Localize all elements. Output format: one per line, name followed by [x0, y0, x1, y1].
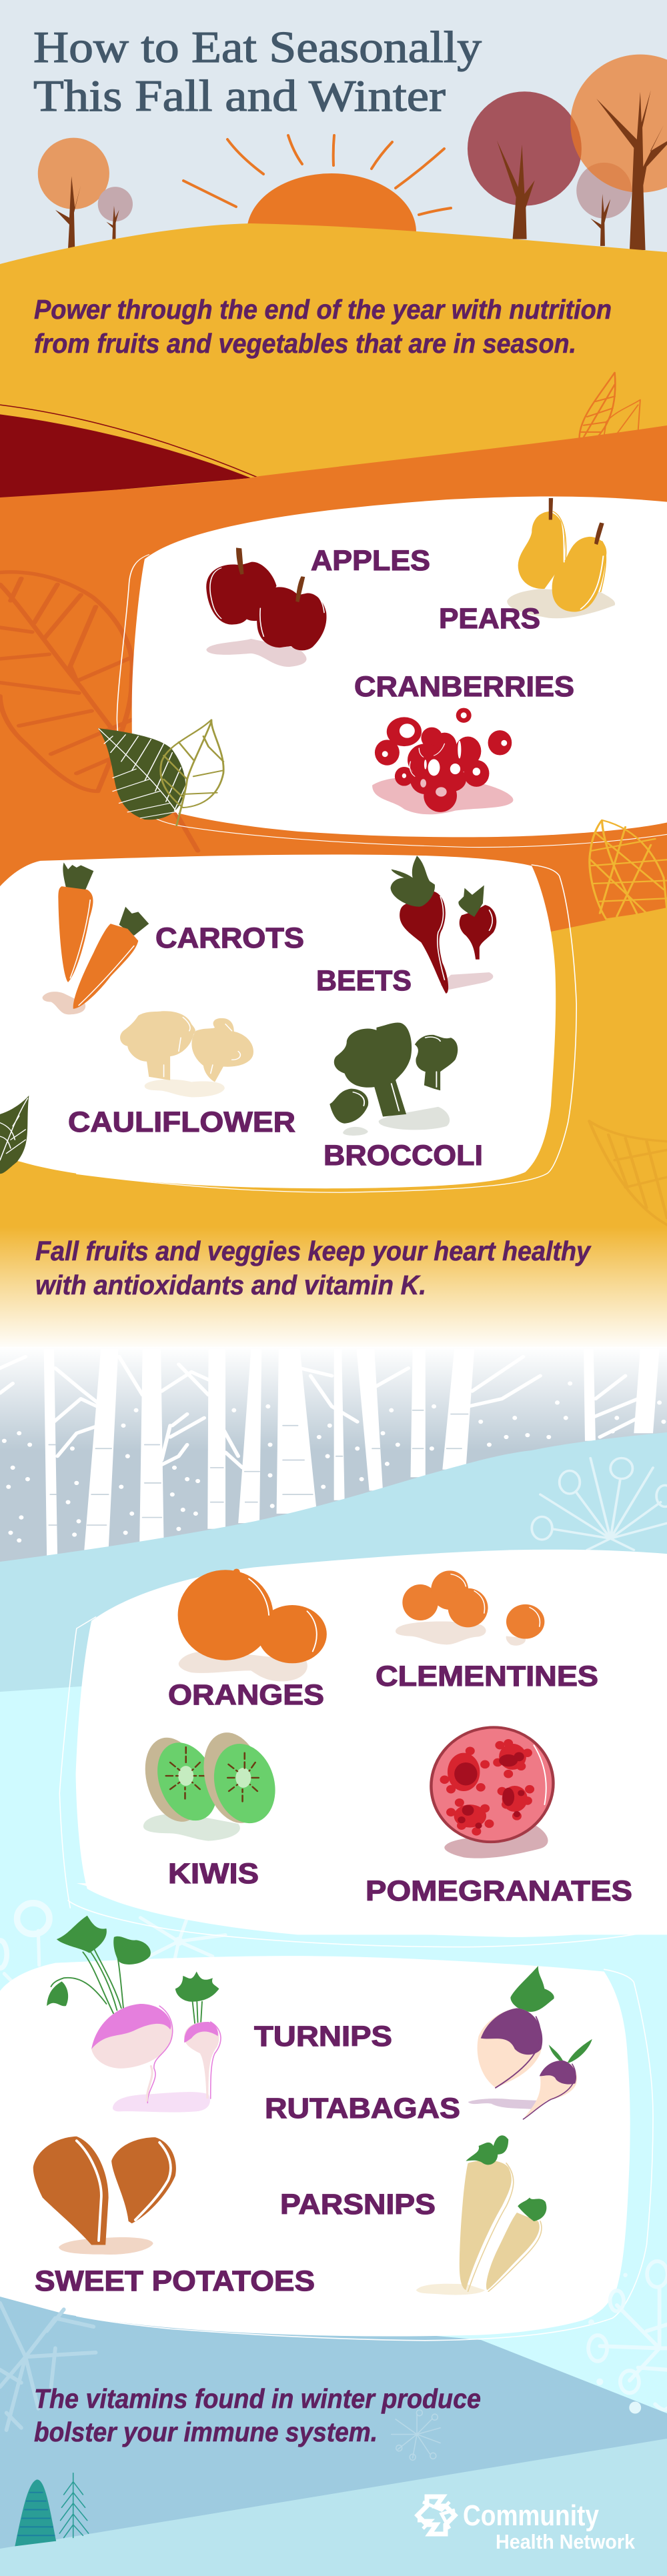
snowflake top right: [532, 1458, 667, 1550]
dark red hill: [0, 405, 257, 500]
sun: [247, 173, 416, 291]
icon: rutabagas: [468, 1966, 592, 2119]
logo: Community Health Network: Health Network: [496, 2530, 636, 2553]
icon: apples: [206, 547, 327, 667]
panel 3 labels: ORANGES: [168, 1679, 324, 1711]
fall closing text: Fall fruits and veggies keep your heart healthy: [35, 1236, 592, 1266]
panel 1 labels: APPLES: [311, 545, 430, 577]
orange hill: [0, 425, 667, 1000]
panel 4 labels: SWEET POTATOES: [35, 2265, 315, 2297]
sky background: [0, 0, 667, 333]
panel 2 white: carrots beets cauliflower broccoli: [0, 854, 576, 1192]
winter forest: [0, 1347, 667, 1574]
panel 3 bottom edge and outline: [68, 1883, 667, 1947]
panel 1 labels: [311, 545, 574, 703]
icon: pomegranate: [417, 1715, 568, 1858]
panel 2 labels: CARROTS: [155, 922, 304, 954]
winter closing text: The vitamins found in winter produce: [34, 2383, 481, 2414]
icon: logo knot: [418, 2497, 455, 2534]
tree: teal line: [59, 2473, 89, 2537]
winter hill light blue: [0, 1432, 667, 1707]
decorative leaves on hill: [580, 373, 640, 439]
title: This Fall and Winter: [33, 71, 446, 121]
fall closing text: with antioxidants and vitamin K.: [35, 1270, 426, 1300]
snowflake right on panel 4: [588, 2261, 667, 2414]
panel 3 labels: KIWIS: [168, 1858, 259, 1890]
panel 4 white: turnips rutabagas parsnips sweet potatoes: [0, 1916, 653, 2341]
panel 4 labels: RUTABAGAS: [265, 2093, 460, 2125]
panel 3 labels: POMEGRANATES: [366, 1875, 632, 1907]
panel 2 labels: [68, 922, 483, 1172]
panel 3 labels: CLEMENTINES: [376, 1660, 598, 1692]
icon: broccoli: [329, 1023, 458, 1136]
logo: Community Health Network: [418, 2497, 636, 2553]
faint leaf on yellow: [589, 1121, 667, 1225]
leaf: left green small: [0, 1096, 29, 1174]
tree: small left orange: [38, 138, 109, 248]
leaf: hatched green: [98, 728, 187, 820]
tree: large right group: [468, 55, 667, 250]
panel 3 labels: [168, 1660, 632, 1907]
title: [33, 23, 482, 121]
panel 2 labels: BROCCOLI: [323, 1140, 483, 1172]
winter closing text: bolster your immune system.: [34, 2417, 378, 2447]
sun rays: [183, 135, 451, 215]
intro text: [34, 294, 612, 359]
icon: cauliflower: [120, 1011, 253, 1097]
yellow hill background: [0, 223, 667, 1354]
winter lower pale field: [0, 1667, 667, 2427]
title: How to Eat Seasonally: [33, 23, 482, 72]
intro text: from fruits and vegetables that are in season.: [34, 328, 576, 359]
panel 1 white: apples pears cranberries: [117, 496, 667, 848]
winter closing text: [34, 2383, 481, 2447]
leaf: olive outline: [161, 720, 223, 826]
snowflake lower left: [0, 2303, 96, 2430]
tree: teal solid: [15, 2479, 56, 2546]
icon: sweet potatoes: [33, 2137, 176, 2255]
icon: cranberries: [372, 708, 513, 814]
snowflakes on pale field: [0, 1903, 225, 1983]
icon: parsnips: [416, 2135, 546, 2295]
panel 4 labels: TURNIPS: [254, 2021, 392, 2053]
small snowflake by text: [392, 2410, 440, 2460]
intro text: Power through the end of the year with nutrition: [34, 294, 612, 325]
bottom light blue band: [0, 2439, 667, 2576]
panel 2 labels: CAULIFLOWER: [68, 1106, 295, 1138]
icon: turnips: [47, 1916, 221, 2113]
leaf: yellow net: [590, 820, 667, 920]
panel 1 labels: PEARS: [439, 603, 540, 635]
logo: Community Health Network: Community: [463, 2499, 599, 2532]
icon: pears: [507, 498, 615, 618]
icon: beets: [391, 856, 496, 994]
icon: carrots: [43, 862, 149, 1014]
panel 4 labels: PARSNIPS: [280, 2189, 436, 2221]
icon: kiwis: [136, 1727, 283, 1841]
tree: small left mauve: [98, 187, 133, 239]
panel 2 labels: BEETS: [316, 965, 412, 997]
icon: clementines: [396, 1570, 544, 1646]
icon: oranges: [178, 1568, 327, 1681]
darker blue lower field: [0, 2297, 667, 2576]
panel 4 labels: [35, 2021, 460, 2297]
panel 1 labels: CRANBERRIES: [354, 671, 574, 703]
big background leaf: [0, 572, 198, 851]
panel 3 white: oranges clementines kiwis pomegranates: [59, 1550, 667, 1935]
fall closing text: [35, 1236, 592, 1300]
